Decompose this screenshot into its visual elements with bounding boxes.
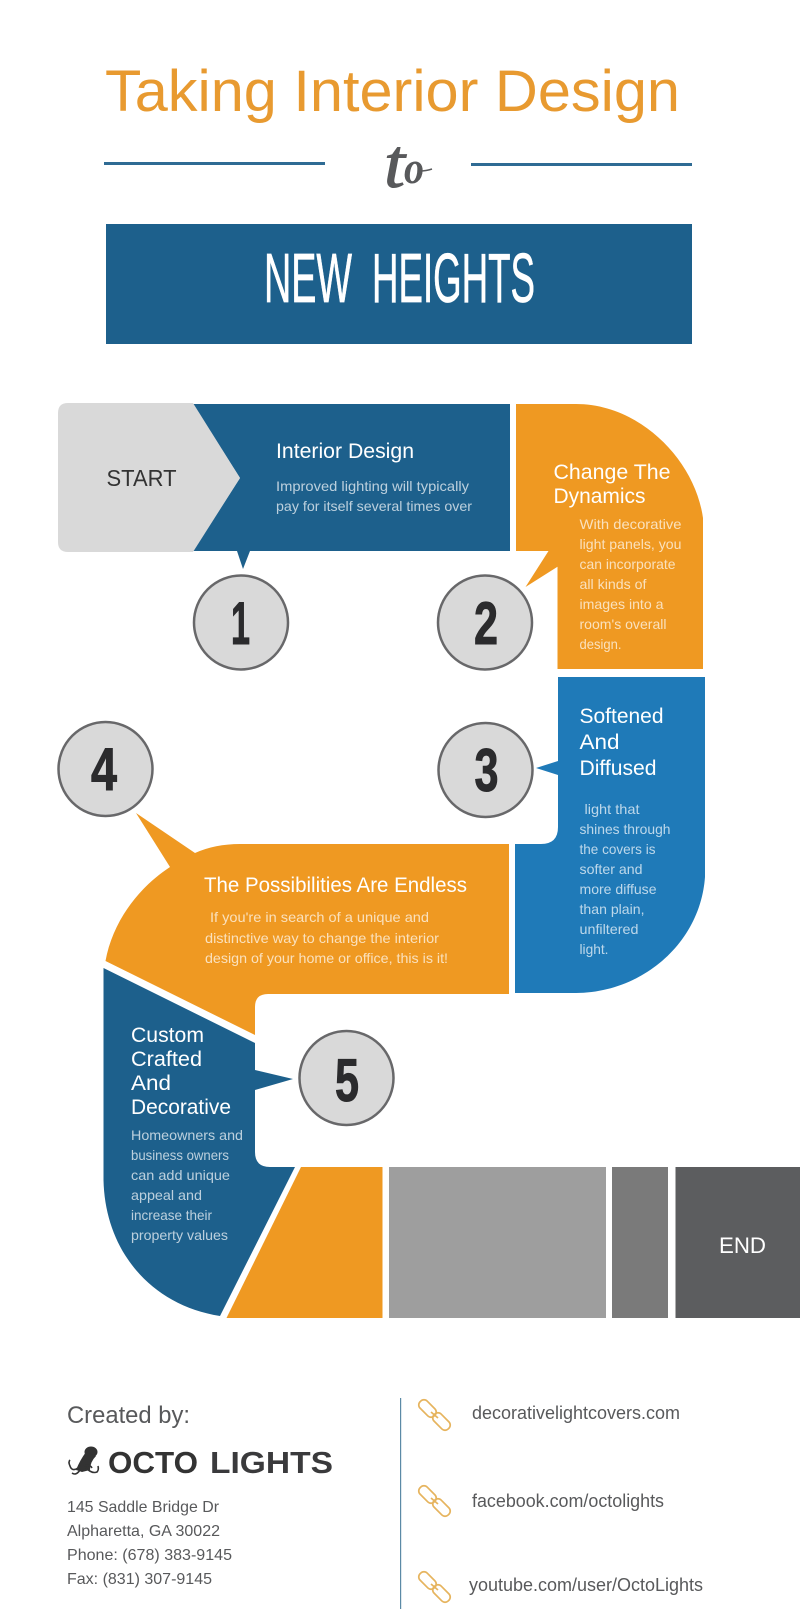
icon: link 2 [417, 1484, 452, 1518]
panel: step 5 custom crafted: Crafted [131, 1048, 202, 1071]
address: Phone: (678) 383-9145 [67, 1547, 232, 1564]
end track: orange segment [226, 1167, 382, 1318]
panel: step 3 softened and diffused: than plain, [580, 901, 644, 917]
panel: step 2 change the dynamics: room's overall [580, 616, 666, 632]
icon: link 1 [417, 1398, 452, 1432]
address [67, 1499, 232, 1588]
panel: step 5 custom crafted: appeal and [131, 1187, 202, 1203]
panel: step 1 interior design: Improved lighting will typically [276, 478, 469, 494]
panel: step 2 change the dynamics [516, 404, 703, 669]
panel: step 1 interior design: Interior Design [276, 440, 414, 463]
panel: step 4 possibilities: distinctive way to change the interior [205, 930, 439, 946]
panel: step 5 custom crafted [104, 968, 295, 1316]
badge 3 [438, 723, 532, 817]
panel: step 3 softened and diffused: unfiltered [580, 921, 638, 937]
logo: octo lights [69, 1445, 333, 1480]
address: 145 Saddle Bridge Dr [67, 1499, 220, 1516]
logo: octo lights: OCTO [108, 1445, 198, 1480]
divider with the word to: t [384, 126, 407, 203]
banner: new heights: HEIGHTS [372, 239, 535, 317]
panel: step 3 softened and diffused: And [580, 731, 620, 754]
panel: step 2 change the dynamics: light panels, you [580, 536, 682, 552]
panel: step 5 custom crafted: Homeowners and [131, 1127, 243, 1143]
panel: step 5 custom crafted: business owners [131, 1147, 229, 1163]
panel: step 5 custom crafted: increase their [131, 1207, 212, 1223]
panel: step 3 softened and diffused: shines through [580, 821, 670, 837]
panel: step 4 possibilities [106, 813, 509, 1035]
created by: Created by: [67, 1402, 190, 1429]
panel: step 2 change the dynamics: Dynamics [554, 485, 646, 508]
panel: step 1 interior design [193, 404, 510, 569]
end block [676, 1167, 800, 1318]
panel: step 2 change the dynamics: images into a [580, 596, 664, 612]
logo: octo lights: LIGHTS [210, 1445, 333, 1480]
divider with the word to: o [404, 142, 424, 193]
banner: new heights [106, 224, 692, 344]
panel: step 3 softened and diffused [515, 677, 705, 993]
badge 2 [438, 576, 532, 670]
panel: step 5 custom crafted: Custom [131, 1024, 204, 1047]
footer divider [400, 1398, 401, 1609]
panel: step 3 softened and diffused: Diffused [580, 757, 656, 780]
panel: step 4 possibilities: design of your home or office, this is it! [205, 950, 448, 966]
end track: light grey segment [389, 1167, 606, 1318]
panel: step 1 interior design: pay for itself several times over [276, 498, 472, 514]
panel: step 4 possibilities: The Possibilities Are Endless [204, 874, 467, 897]
badge 1: 1 [231, 590, 250, 657]
panel: step 4 possibilities: If you're in search of a unique and [210, 909, 429, 925]
panel: step 2 change the dynamics: can incorporate [580, 556, 676, 572]
link: youtube: youtube.com/user/OctoLights [469, 1575, 703, 1595]
badge 3: 3 [474, 737, 498, 804]
icon: link 3 [417, 1570, 452, 1604]
panel: step 2 change the dynamics: all kinds of [580, 576, 647, 592]
panel: step 5 custom crafted: can add unique [131, 1167, 230, 1183]
title: Taking Interior Design [105, 59, 680, 124]
badge 4 [58, 722, 152, 816]
panel: step 2 change the dynamics: Change The [554, 461, 670, 484]
link: facebook: facebook.com/octolights [472, 1491, 664, 1511]
panel: step 3 softened and diffused: light that [584, 801, 640, 817]
badge 5: 5 [335, 1047, 359, 1114]
panel: step 3 softened and diffused: Softened [580, 705, 664, 728]
panel: step 2 change the dynamics: With decorative [580, 516, 682, 532]
panel: step 3 softened and diffused: the covers is [580, 841, 656, 857]
panel: step 3 softened and diffused: light. [580, 941, 608, 957]
badge 5 [300, 1031, 394, 1125]
divider with the word to [104, 126, 692, 203]
panel: step 3 softened and diffused: softer and [580, 861, 642, 877]
address: Alpharetta, GA 30022 [67, 1523, 220, 1540]
icon: octopus [69, 1446, 98, 1474]
end track: mid grey segment [612, 1167, 668, 1318]
link: website: decorativelightcovers.com [472, 1403, 680, 1423]
panel: step 5 custom crafted: And [131, 1072, 171, 1095]
start arrow [58, 403, 240, 552]
badge 2: 2 [474, 590, 498, 657]
banner: new heights: NEW [264, 239, 352, 317]
address: Fax: (831) 307-9145 [67, 1571, 212, 1588]
start arrow: START [106, 465, 176, 491]
end block: END [719, 1233, 766, 1258]
panel: step 5 custom crafted: Decorative [131, 1096, 231, 1119]
panel: step 3 softened and diffused: more diffuse [580, 881, 657, 897]
panel: step 5 custom crafted: property values [131, 1227, 228, 1243]
badge 4: 4 [91, 736, 117, 803]
panel: step 2 change the dynamics: design. [580, 636, 622, 652]
badge 1 [194, 576, 288, 670]
